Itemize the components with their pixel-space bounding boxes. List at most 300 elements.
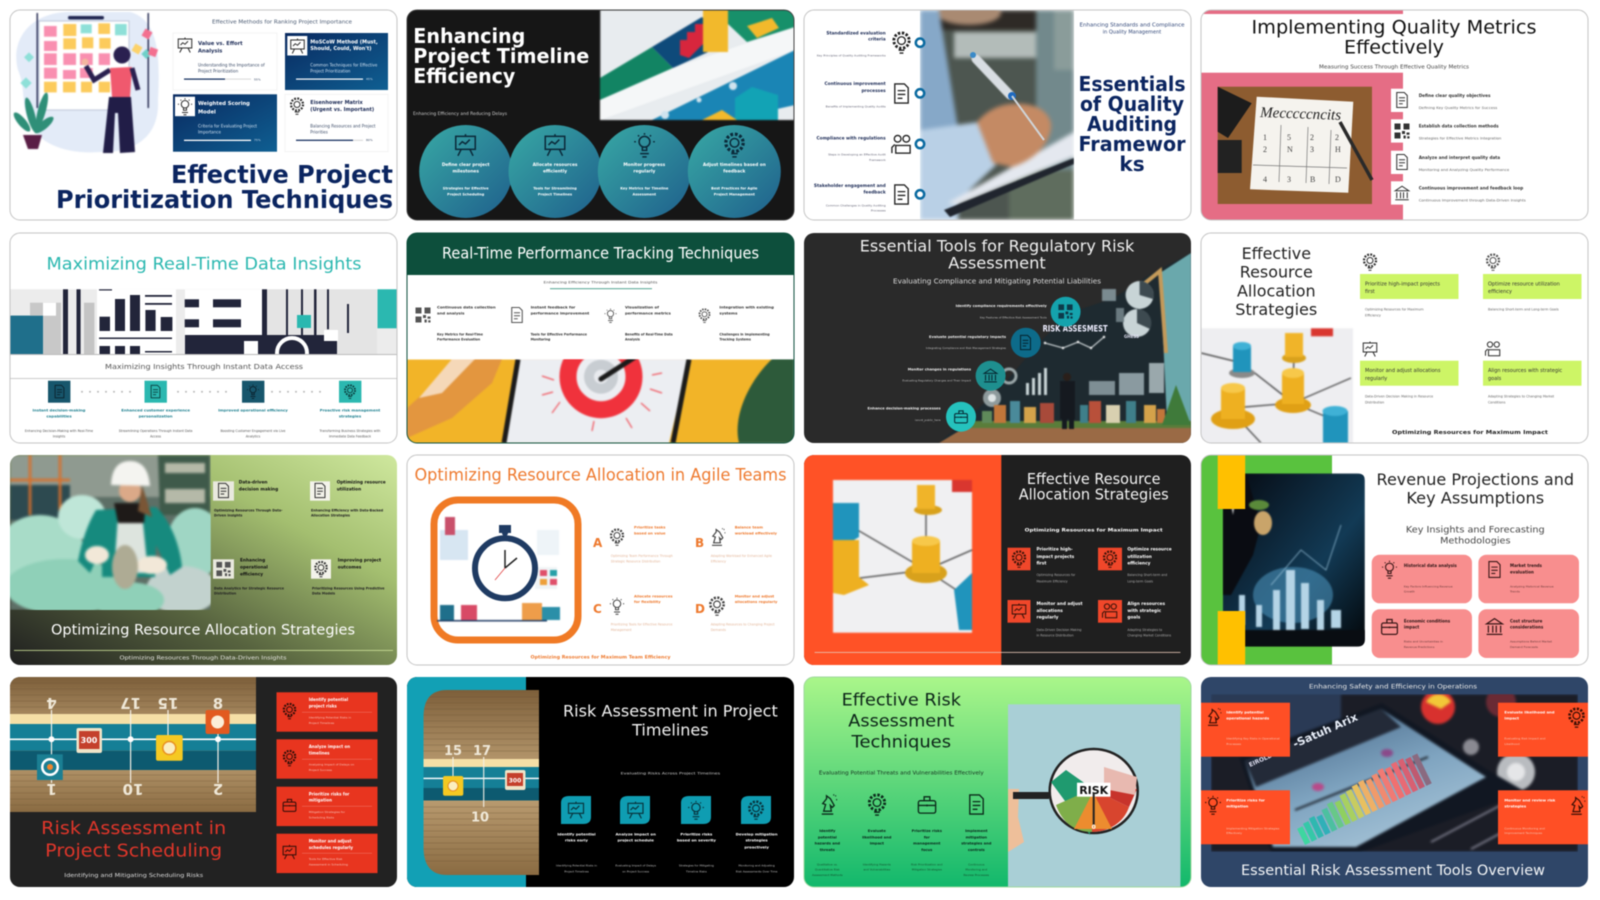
image: handwritten metrics note on desk: N <box>1287 145 1293 154</box>
item: Improving project outcomes: outcomes <box>338 565 362 571</box>
title: Essential Risk Assessment Tools Overview <box>1241 863 1545 879</box>
item: Standardized evaluation criteria <box>817 31 924 58</box>
item: Improving project outcomes: Data Models <box>312 592 335 596</box>
callout: Monitor and review risk strategies: Monitor and review risk <box>1504 797 1556 802</box>
image: handwritten metrics note on desk: H <box>1335 145 1341 154</box>
item D: Monitor and adjust allocations regularly: Adapting Resources to Changing Project <box>711 623 775 627</box>
panel: Real-Time Performance Tracking Techniques <box>407 233 794 443</box>
panel: Effective Resource Allocation Strategies (orange) <box>804 455 1191 665</box>
item: Standardized evaluation criteria: Standardized evaluation <box>826 31 886 37</box>
title: Effective Project <box>171 160 393 189</box>
circle: Adjust timelines based on feedback: Best Practices for Agile <box>711 186 758 190</box>
item: Establish data collection methods: Strategies for Effective Metrics Integration <box>1419 136 1502 141</box>
item: Continuous improvement processes: processes <box>861 88 886 94</box>
image: wooden timeline: 1 <box>46 780 57 798</box>
title: Strategies <box>1235 300 1317 319</box>
panel: Optimizing Resource Allocation Strategies <box>0 455 397 665</box>
card: Prioritize risks for mitigation: Scheduling Risks <box>309 815 334 819</box>
item: Prioritize risks for management focus: Mitigation Strategies <box>912 868 942 872</box>
footer caption: Optimizing Resources for Maximum Team Efficiency <box>530 654 671 659</box>
item: Instant feedback for performance improvement: Tools for Effective Performance <box>531 332 587 336</box>
image: handwritten metrics note on desk: 3 <box>1287 175 1291 184</box>
title: Efficiency <box>413 64 515 88</box>
item: Compliance with regulations: Compliance with regulations <box>816 135 886 141</box>
panel: Effective Project Prioritization Techniques <box>10 10 397 220</box>
item: Optimize resource utilization efficiency: Long-term Goals <box>1127 579 1153 583</box>
item: Develop mitigation strategies proactively: Risk Assessments Over Time <box>736 869 778 873</box>
panel: Essential Tools for Regulatory Risk Assessment <box>804 233 1191 443</box>
item: Data-driven decision making: decision making <box>239 487 278 493</box>
item: Implement mitigation strategies and controls: strategies and <box>961 842 992 846</box>
item: Implement mitigation strategies and controls: mitigation <box>966 835 987 839</box>
card: Weighted Scoring Model: Weighted Scoring <box>198 101 250 107</box>
item: Visualization of performance metrics: performance metrics <box>625 310 671 315</box>
image: handwritten metrics note on desk: 2 <box>1263 145 1267 154</box>
card: Value vs. Effort Analysis: Project Prioritization <box>198 69 239 74</box>
card: Economic conditions impact: Revenue Predictions <box>1404 645 1435 649</box>
item: Monitor and adjust allocations regularly <box>1008 600 1083 637</box>
panel: Risk Assessment in Project Scheduling <box>10 677 397 887</box>
item D: Monitor and adjust allocations regularly: Monitor and adjust <box>735 594 774 598</box>
callout: Evaluate likelihood and impact: Likelihood <box>1504 742 1520 746</box>
item: Align resources with strategic goals: goals <box>1127 615 1141 621</box>
item: Develop mitigation strategies proactively: strategies <box>745 838 768 843</box>
item: Improved operational efficiency <box>218 381 288 438</box>
item: Optimizing resource utilization: Optimizing resource <box>337 480 386 486</box>
callout: Prioritize risks for mitigation: Implementing Mitigation Strategies <box>1226 826 1280 830</box>
title: Enhancing <box>413 24 525 48</box>
item: Evaluate potential regulatory impacts <box>926 328 1041 358</box>
card: Identify potential project risks: Project Timelines <box>309 721 335 725</box>
image: handwritten metrics note on desk: D <box>1335 175 1341 184</box>
title: Techniques <box>850 732 951 752</box>
item: Monitor and adjust allocations regularly: regularly <box>1365 376 1387 382</box>
item: Monitor and adjust allocations regularly: in Resource Distribution <box>1036 633 1074 637</box>
item: Align resources with strategic goals: Changing Market Conditions <box>1127 633 1171 637</box>
title <box>1078 72 1186 176</box>
item: Identify compliance requirements effectively: Key Features of Effective Risk Assessment Tools <box>980 315 1047 319</box>
card: Value vs. Effort Analysis: Value vs. Effort <box>198 41 243 47</box>
item: Optimizing resource utilization <box>310 480 386 518</box>
icon: gear head <box>291 98 303 114</box>
title: Risk Assessment in <box>41 818 226 839</box>
item D: Monitor and adjust allocations regularly: Demands <box>711 628 726 632</box>
item: Identify potential hazards and threats: Quantitative Risk <box>815 868 840 872</box>
item: Instant decision-making capabilities: Insights <box>53 434 66 438</box>
callout: Monitor and review risk strategies: Improvement Techniques <box>1504 831 1543 835</box>
card: Monitor and adjust schedules regularly: Tools for Effective Risk <box>308 857 343 861</box>
item C: Allocate resources for flexibility: C <box>593 602 602 616</box>
item: Identify potential hazards and threats <box>812 795 843 877</box>
card: MoSCoW Method: Common Techniques for Effective <box>310 63 378 68</box>
item: Monitor and adjust allocations regularly <box>1360 342 1458 404</box>
item: Continuous data collection and analysis: Key Metrics for Real-Time <box>437 332 483 336</box>
item: Enhancing operational efficiency: efficiency <box>240 571 263 577</box>
circle: Adjust timelines based on feedback: Adjust timelines based on <box>703 162 766 168</box>
title: Effective Resource <box>1027 470 1161 488</box>
image: worker sorting bags in warehouse <box>0 455 223 618</box>
item: Standardized evaluation criteria: Key Principles of Quality Auditing Frameworks <box>817 54 886 58</box>
item: Evaluate likelihood and impact: Evaluate <box>868 829 886 833</box>
subtitle: Enhancing Efficiency and Reducing Delays <box>413 111 508 117</box>
item: Analyze impact on project schedule: on Project Success <box>622 869 650 873</box>
card: Value vs. Effort Analysis <box>173 33 277 90</box>
item: Optimizing resource utilization: utilization <box>337 487 361 493</box>
card: Economic conditions impact <box>1372 609 1472 658</box>
item: Analyze and interpret quality data: Monitoring and Analyzing Quality Performance <box>1419 167 1510 172</box>
item: Prioritize risks for management focus: focus <box>921 848 933 852</box>
item: Evaluate likelihood and impact: Identifying Hazards <box>863 863 891 867</box>
item: Identify potential hazards and threats: hazards and <box>815 842 840 846</box>
image: handwritten metrics note on desk <box>1218 87 1372 204</box>
title: Allocation Strategies <box>1019 485 1169 503</box>
item: Enhancing operational efficiency: Enhancing <box>240 558 265 564</box>
item: Proactive risk management strategies: Immediate Data Feedback <box>329 434 371 438</box>
item: Identify potential hazards and threats: Assessment Methods <box>812 873 843 877</box>
image: handwritten metrics note on desk: 2 <box>1335 133 1339 142</box>
item: Identify potential risks early: risks early <box>565 838 588 843</box>
card: Monitor and adjust schedules regularly: Monitor and adjust <box>309 838 352 844</box>
callout: Identify potential operational hazards: operational hazards <box>1226 715 1270 720</box>
item: Identify potential hazards and threats: Qualitative vs. <box>817 863 838 867</box>
item: Instant decision-making capabilities: capabilities <box>46 413 72 418</box>
title: Key Assumptions <box>1406 488 1544 507</box>
card: Cost structure considerations: Cost structure <box>1510 618 1543 623</box>
image: handwritten metrics note on desk: 1 <box>1263 133 1267 142</box>
image: risk assessment chalkboard: GHESS <box>1124 334 1139 339</box>
card: Monitor and adjust schedules regularly: schedules regularly <box>309 845 353 850</box>
card: Analyze impact on timelines <box>276 739 378 779</box>
subtitle: Evaluating Risks Across Project Timelines <box>621 770 720 775</box>
item A: Prioritize tasks based on value: based on value <box>634 532 666 536</box>
subtitle <box>1406 525 1545 546</box>
item: Align resources with strategic goals: Align resources with strategic <box>1488 368 1562 374</box>
item: Identify potential risks early <box>556 796 597 873</box>
image: wooden timeline: 17 <box>120 694 141 712</box>
item: Prioritize risks for management focus: Prioritize risks <box>912 829 943 833</box>
circle: Allocate resources efficiently: efficiently <box>543 169 567 175</box>
image: abstract data bars <box>10 288 398 355</box>
item: Continuous improvement processes <box>824 81 924 109</box>
item B: Balance team workload effectively: Adapting Workload for Enhanced Agile <box>711 554 772 558</box>
item: Evaluate likelihood and impact <box>862 795 892 872</box>
callout: Evaluate likelihood and impact: Evaluate likelihood and <box>1504 710 1555 715</box>
item: Monitor changes in regulations: Evaluating Regulatory Changes and Their Impact <box>902 379 972 383</box>
item: Enhancing operational efficiency: operational <box>240 565 268 571</box>
item: Evaluate likelihood and impact: likelihood and <box>862 835 892 839</box>
panel: Implementing Quality Metrics Effectively <box>1201 10 1588 221</box>
title <box>41 818 226 862</box>
item: Identify potential risks early: Project Timelines <box>564 869 589 873</box>
item: Continuous data collection and analysis: and analysis <box>437 310 465 315</box>
item: Instant feedback for performance improvement: performance improvement <box>531 310 589 315</box>
image: isometric timeline <box>600 10 795 120</box>
panel: Essentials of Quality Auditing Frameworks <box>804 1 1191 220</box>
subtitle: Enhancing Efficiency Through Instant Data Insights <box>544 279 658 284</box>
item: Enhanced customer experience personalization: Enhanced customer experience <box>121 407 190 412</box>
card: Prioritize risks for mitigation: Prioritize risks for <box>309 791 349 796</box>
item C: Allocate resources for flexibility: Management <box>611 628 632 632</box>
card: Value vs. Effort Analysis: Analysis <box>198 49 222 55</box>
card: Analyze impact on timelines: timelines <box>309 750 330 755</box>
item: Optimize resource utilization efficiency <box>1098 547 1172 583</box>
item: Data-driven decision making: Driven Insights <box>214 514 242 518</box>
circle: Adjust timelines based on feedback <box>688 125 781 218</box>
card: Monitor and adjust schedules regularly: Assessment in Scheduling <box>309 862 348 866</box>
item: Proactive risk management strategies: Transforming Business Strategies with <box>319 429 380 433</box>
item: Monitor changes in regulations: Monitor changes in regulations <box>908 368 971 372</box>
callout: Evaluate likelihood and impact: Evaluating Risk Impact and <box>1504 737 1545 741</box>
item: Establish data collection methods <box>1391 119 1502 143</box>
title <box>1252 16 1536 58</box>
item: Compliance with regulations: Framework <box>869 158 886 162</box>
image: wooden timeline <box>423 690 539 875</box>
card: Market trends evaluation: evaluation <box>1510 569 1534 574</box>
item: Enhanced customer experience personalization <box>119 381 193 438</box>
item: Identify potential hazards and threats: Identify <box>819 829 836 833</box>
item: Monitor changes in regulations <box>902 361 1006 391</box>
item: Optimize resource utilization efficiency <box>1483 254 1582 311</box>
item D: Monitor and adjust allocations regularly: D <box>695 602 705 616</box>
title: Essential Tools for Regulatory Risk <box>860 237 1135 256</box>
card: Cost structure considerations: Assumptions Behind Market <box>1510 639 1553 643</box>
item: Align resources with strategic goals: Align resources <box>1127 601 1165 607</box>
item A: Prioritize tasks based on value: A <box>593 536 603 550</box>
callout: Evaluate likelihood and impact <box>1498 703 1588 757</box>
callout: Identify potential operational hazards: Identifying Key Risks in Operational <box>1226 737 1280 741</box>
circle: Monitor progress regularly: Monitor progress <box>623 162 666 168</box>
header band <box>407 233 794 275</box>
item: Visualization of performance metrics: Visualization of <box>625 304 659 309</box>
item: Monitor and adjust allocations regularly: Data-Driven Decision Making <box>1036 628 1082 632</box>
title: Effectively <box>1344 36 1444 58</box>
item: Implement mitigation strategies and controls: Continuous <box>968 863 985 867</box>
item: Improving project outcomes: Improving project <box>338 558 381 564</box>
image: risk assessment chalkboard: RISK ASSESMEST <box>1043 325 1108 335</box>
item: Instant decision-making capabilities <box>25 381 93 438</box>
item: Instant feedback for performance improvement <box>512 304 589 342</box>
image: network of pins <box>833 480 972 633</box>
item: Prioritize high-impact projects first: Prioritize high- <box>1036 547 1073 553</box>
item: Integration with existing systems: Integration with existing <box>719 304 774 309</box>
item: Evaluate potential regulatory impacts: Evaluate potential regulatory impacts <box>929 335 1006 339</box>
title <box>1019 470 1169 503</box>
item: Prioritize high-impact projects first <box>1360 254 1458 318</box>
item A: Prioritize tasks based on value: Prioritize tasks <box>634 525 666 529</box>
card: Weighted Scoring Model: Importance <box>198 129 221 134</box>
item: Stakeholder engagement and feedback: Processes <box>871 209 886 213</box>
subtitle: Methodologies <box>1440 536 1511 546</box>
item: Implement mitigation strategies and controls: controls <box>968 848 986 852</box>
subtitle: Measuring Success Through Effective Quality Metrics <box>1319 65 1469 71</box>
card: Analyze impact on timelines: Analyze impact on <box>309 744 350 749</box>
item: Align resources with strategic goals: goals <box>1488 376 1502 382</box>
item: Identify potential risks early: Identify potential <box>557 831 596 836</box>
item: Define clear quality objectives <box>1391 89 1497 112</box>
image: magnifier over risk gauge: RISK <box>1079 784 1109 797</box>
item: Stakeholder engagement and feedback <box>814 183 924 213</box>
item B: Balance team workload effectively <box>695 525 777 564</box>
item B: Balance team workload effectively: Balance team <box>735 525 763 529</box>
circle: Define clear project milestones: Define clear project <box>442 162 490 168</box>
title <box>413 24 589 88</box>
item: Integration with existing systems: Tracking Systems <box>719 338 751 342</box>
header band: Real-Time Performance Tracking Techniques <box>442 243 759 262</box>
card: Eisenhower Matrix: Balancing Resources and Project <box>310 123 376 128</box>
image: hand writing on clipboard <box>920 1 1074 220</box>
card: Historical data analysis: Historical data analysis <box>1404 563 1457 568</box>
image: network of pins <box>1201 328 1353 443</box>
item: Stakeholder engagement and feedback: feedback <box>864 189 886 195</box>
card: Cost structure considerations: considerations <box>1510 625 1544 630</box>
title: Auditing <box>1087 112 1177 136</box>
callout: Prioritize risks for mitigation: Effectively <box>1226 831 1242 835</box>
callout: Prioritize risks for mitigation <box>1201 790 1290 844</box>
item: Align resources with strategic goals <box>1483 342 1582 404</box>
card: Historical data analysis: Growth <box>1404 589 1415 593</box>
item: Enhancing operational efficiency: Distribution <box>214 592 237 596</box>
callout: Identify potential operational hazards: Identify potential <box>1226 710 1264 715</box>
circle: Define clear project milestones: milestones <box>452 169 479 175</box>
item: Define clear quality objectives: Defining Key Quality Metrics for Success <box>1419 105 1497 110</box>
subtitle: Optimizing Resources for Maximum Impact <box>1025 527 1164 533</box>
image: wooden timeline: 300 <box>509 778 521 784</box>
circle: Allocate resources efficiently <box>508 125 602 218</box>
item: Implement mitigation strategies and controls <box>961 795 992 877</box>
item: Proactive risk management strategies: Proactive risk management <box>320 407 380 412</box>
image: handwritten metrics note on desk: 3 <box>1310 145 1314 154</box>
panel: Revenue Projections and Key Assumptions <box>1201 455 1588 665</box>
item C: Allocate resources for flexibility: for flexibility <box>634 600 661 604</box>
panel: Effective Resource Allocation Strategies (white) <box>1201 233 1588 443</box>
item A: Prioritize tasks based on value: Optimizing Team Performance Through <box>611 554 673 558</box>
card: Prioritize risks for mitigation: mitigation <box>309 798 332 803</box>
yellow accent bars <box>1218 455 1245 665</box>
card: Market trends evaluation: Analyzing Historical Revenue <box>1510 584 1554 588</box>
item: Integration with existing systems: Challenges in Implementing <box>719 332 770 336</box>
card: Economic conditions impact: Risks and Uncertainties in <box>1404 639 1443 643</box>
item: Compliance with regulations <box>816 135 924 162</box>
item: Identify potential hazards and threats: threats <box>820 848 836 852</box>
item: Continuous data collection and analysis: Performance Evaluation <box>437 338 481 342</box>
image: wooden timeline: 10 <box>123 780 143 798</box>
item: Continuous improvement and feedback loop: Continuous Improvement through Data-Driven Insights <box>1419 197 1526 202</box>
title: ks <box>1119 152 1145 176</box>
item: Analyze impact on project schedule: Evaluating Impact of Delays <box>615 864 657 868</box>
card: Eisenhower Matrix <box>285 94 388 152</box>
item: Prioritize risks for management focus <box>911 797 943 872</box>
illustration: person at sticky-note board <box>11 12 159 153</box>
item: Optimizing resource utilization: Allocation Strategies <box>311 514 350 518</box>
subtitle: in Quality Management <box>1103 29 1161 35</box>
title: Risk Assessment in Project <box>563 702 778 721</box>
image: wooden timeline: 15 <box>444 744 462 759</box>
item: Optimize resource utilization efficiency: Optimize resource <box>1127 547 1172 553</box>
title: Optimizing Resource Allocation in Agile Teams <box>414 466 787 486</box>
image: tablet with risk dashboard: EIROLD <box>1248 752 1274 769</box>
heading: section subtitle: Effective Methods for Ranking Project Importance <box>212 20 352 26</box>
item: Visualization of performance metrics: Analysis <box>625 338 640 342</box>
card: Cost structure considerations: Demand Forecasts <box>1510 645 1538 649</box>
image: magnifier over risk gauge: 0 <box>1092 824 1096 831</box>
subtitle: Optimizing Resources Through Data-Driven Insights <box>120 655 287 661</box>
subtitle: Key Insights and Forecasting <box>1406 525 1545 535</box>
image: risk assessment chalkboard <box>939 253 1191 443</box>
image: businessman and city skyline <box>1223 473 1366 647</box>
title: Effective Risk <box>842 691 961 711</box>
title: Assessment <box>948 253 1046 272</box>
item A: Prioritize tasks based on value <box>593 525 673 564</box>
title <box>56 160 393 214</box>
card: Weighted Scoring Model <box>173 94 277 152</box>
item: Optimize resource utilization efficiency: Balancing Short-term and <box>1127 573 1167 577</box>
item: Standardized evaluation criteria: criteria <box>868 37 886 43</box>
card: Market trends evaluation: Trends <box>1509 589 1520 593</box>
image: wooden timeline: 2 <box>213 780 223 798</box>
item: Prioritize risks based on severity: Timeline Risks <box>685 869 707 873</box>
icon: presentation board <box>178 38 192 52</box>
item: Visualization of performance metrics <box>605 304 673 342</box>
item: Evaluate potential regulatory impacts: Integrating Compliance and Risk Management Strategies <box>926 346 1007 350</box>
item: Evaluate likelihood and impact: impact <box>870 842 884 846</box>
callout: Monitor and review risk strategies: Continuous Monitoring and <box>1504 826 1545 830</box>
item: Develop mitigation strategies proactively: proactively <box>744 844 769 849</box>
item: Prioritize high-impact projects first: Optimizing Resources for Maximum <box>1365 307 1424 311</box>
card: Monitor and adjust schedules regularly <box>276 834 378 873</box>
title: Resource <box>1240 263 1313 282</box>
item D: Monitor and adjust allocations regularly: allocations regularly <box>735 600 778 604</box>
title <box>860 237 1135 272</box>
circle: Monitor progress regularly <box>598 125 691 218</box>
image: handwritten metrics note on desk: 2 <box>1310 133 1314 142</box>
item B: Balance team workload effectively: workload effectively <box>735 532 777 536</box>
item: Align resources with strategic goals: with strategic <box>1127 608 1162 614</box>
panel: Optimizing Resource Allocation in Agile Teams <box>407 455 794 665</box>
item: Identify potential risks early: Identifying Potential Risks in <box>556 864 597 868</box>
image: wooden timeline: 300 <box>81 736 98 745</box>
subtitle: Enhancing Standards and Compliance <box>1080 22 1184 28</box>
item: Prioritize high-impact projects first: first <box>1365 289 1375 295</box>
item: Monitor and adjust allocations regularly: allocations <box>1036 608 1063 614</box>
item: Optimize resource utilization efficiency: utilization <box>1127 554 1152 560</box>
title <box>563 702 778 739</box>
item: Improved operational efficiency: Analytics <box>246 434 261 438</box>
item: Optimize resource utilization efficiency: efficiency <box>1488 289 1512 295</box>
item: Monitor and adjust allocations regularly: regularly <box>1036 615 1059 621</box>
card: Value vs. Effort Analysis: 55% <box>254 78 261 82</box>
item: Improving project outcomes <box>311 558 385 596</box>
title: Timelines <box>631 720 709 739</box>
card: Weighted Scoring Model: Model <box>198 109 216 115</box>
item: Improved operational efficiency: Boosting Customer Engagement via Live <box>220 429 286 433</box>
item: Compliance with regulations: Steps in Developing an Effective Audit <box>828 153 887 157</box>
item C: Allocate resources for flexibility: Allocate resources <box>634 594 673 598</box>
item: Instant feedback for performance improvement: Instant feedback for <box>531 304 575 309</box>
item: Prioritize risks for management focus: management <box>913 842 941 846</box>
item B: Balance team workload effectively: Efficiency <box>711 560 726 564</box>
card: Identify potential project risks: Identify potential <box>309 697 349 702</box>
item: Improving project outcomes: Prioritizing Resources Using Predictive <box>312 586 385 590</box>
panel: Enhancing Project Timeline Efficiency <box>407 10 795 220</box>
card: Weighted Scoring Model: Criteria for Evaluating Project <box>198 123 257 128</box>
image: wooden timeline: 15 <box>158 694 178 712</box>
card: MoSCoW Method: Project Prioritization <box>310 69 351 74</box>
callout: Monitor and review risk strategies <box>1498 790 1588 844</box>
item: Integration with existing systems <box>700 304 774 342</box>
title: Maximizing Real-Time Data Insights <box>46 254 362 274</box>
card: Value vs. Effort Analysis: Understanding the Importance of <box>198 63 265 68</box>
callout: Prioritize risks for mitigation: mitigation <box>1226 803 1249 808</box>
